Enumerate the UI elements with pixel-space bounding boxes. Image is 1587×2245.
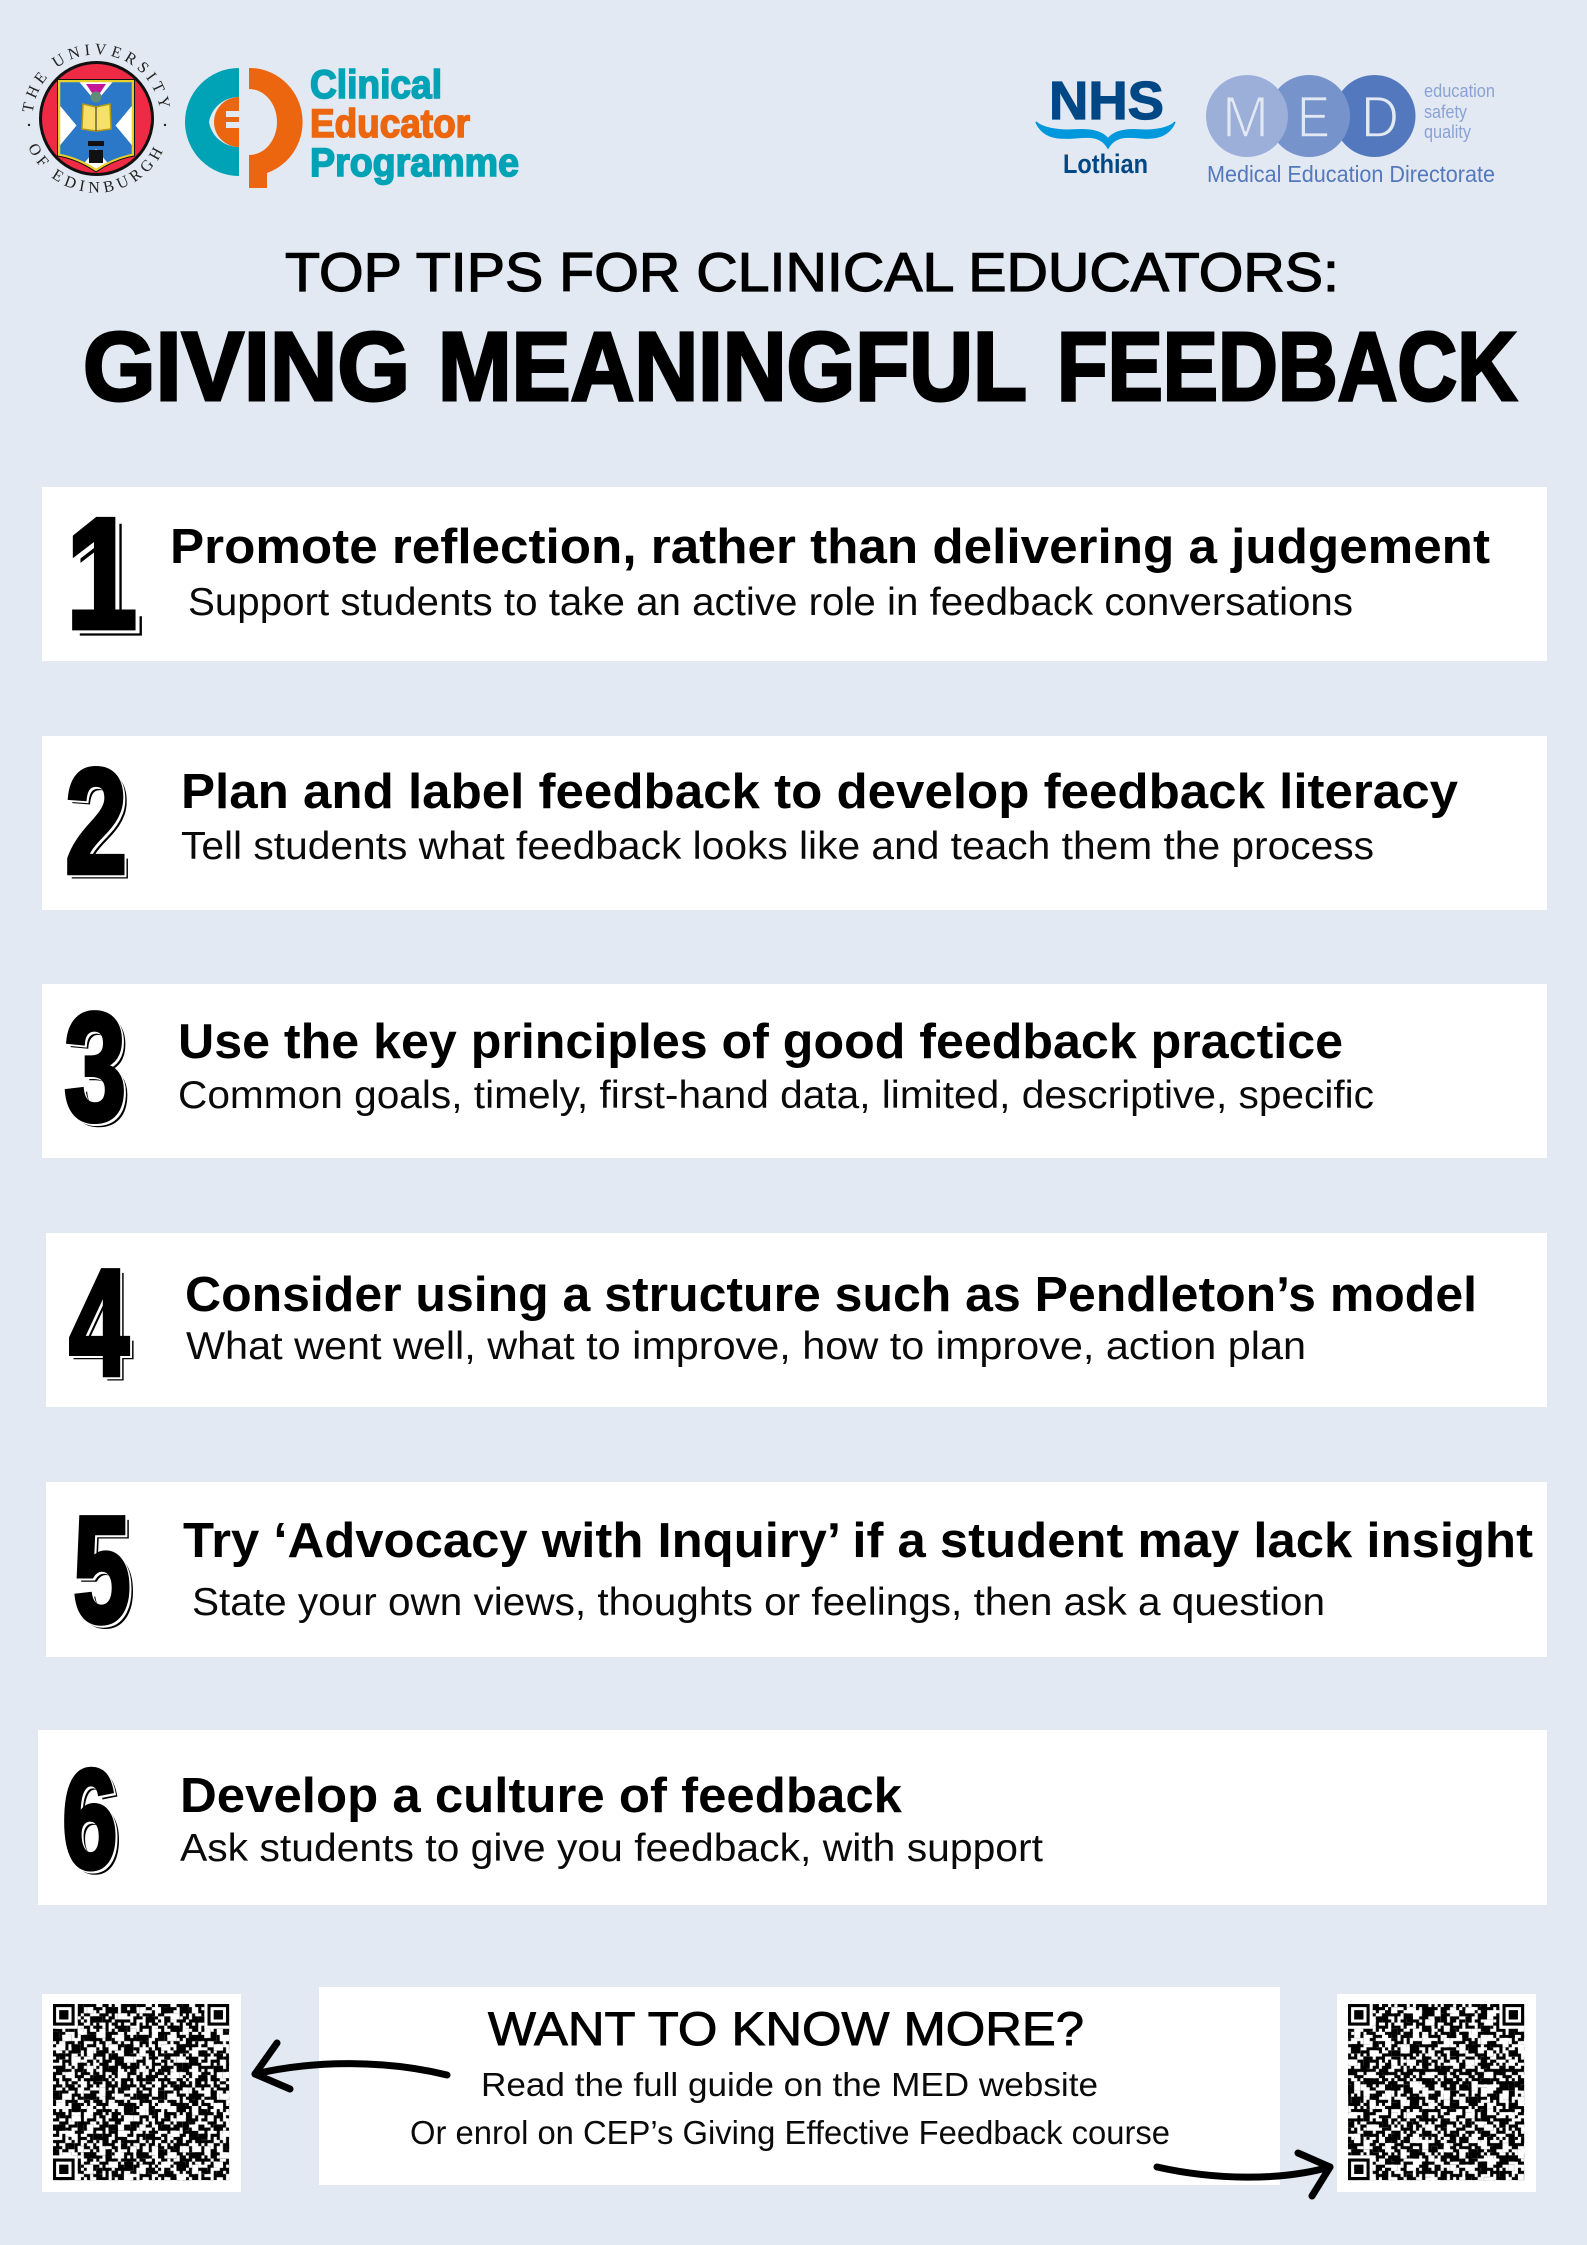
number 6: 6 xyxy=(64,1743,120,1901)
tip 2 text: Tell students what feedback looks like and teach them the process xyxy=(181,825,1374,868)
logo: University of Edinburgh seal: THE UNIVERSITY xyxy=(22,44,170,112)
logo: Medical Education Directorate: E xyxy=(1297,85,1330,150)
logo: Clinical Educator Programme xyxy=(185,63,519,188)
logo: NHS Lothian xyxy=(1036,71,1175,179)
panel: tip 4 xyxy=(46,1233,1547,1411)
tip 1 text: Support students to take an active role in feedback conversations xyxy=(188,581,1353,624)
panel: tip 6 xyxy=(38,1730,1547,1905)
logo: Medical Education Directorate: M xyxy=(1222,85,1269,150)
number 4: 4 xyxy=(71,1240,131,1409)
title: giving meaningful feedback: GIVING xyxy=(83,312,410,421)
logo: Medical Education Directorate xyxy=(1206,75,1495,187)
logo: Clinical Educator Programme: Programme xyxy=(310,141,519,185)
tip 1 heading: Promote reflection, rather than delivering a judgement xyxy=(170,520,1490,574)
tip 3 heading: Use the key principles of good feedback practice xyxy=(178,1015,1343,1069)
logo: Clinical Educator Programme: Educator xyxy=(310,102,470,146)
tip 6 text: Ask students to give you feedback, with support xyxy=(180,1827,1043,1870)
logo: NHS Lothian: NHS xyxy=(1049,71,1164,131)
number 4: 4 xyxy=(73,1242,133,1411)
number 3: 3 xyxy=(66,982,128,1155)
logo: Medical Education Directorate: education xyxy=(1424,81,1495,101)
enrol line: Or enrol on CEP’s Giving Effective Feedback course xyxy=(410,2114,1170,2151)
panel: tip 5 xyxy=(46,1482,1547,1659)
title: giving meaningful feedback: MEANINGFUL xyxy=(438,312,1027,421)
number 5: 5 xyxy=(75,1486,133,1657)
tip 4 heading: Consider using a structure such as Pendleton’s model xyxy=(185,1268,1477,1322)
tip 5 heading: Try ‘Advocacy with Inquiry’ if a student may lack insight xyxy=(183,1514,1533,1568)
QR code: CEP course xyxy=(1337,1994,1536,2192)
arrow: to right QR code xyxy=(1157,2153,1330,2196)
logo: NHS Lothian: Lothian xyxy=(1063,149,1148,179)
number 2: 2 xyxy=(65,738,127,906)
logo: Medical Education Directorate: safety xyxy=(1424,102,1467,122)
tip 2 heading: Plan and label feedback to develop feedback literacy xyxy=(181,765,1458,819)
logo: Clinical Educator Programme: Clinical xyxy=(310,63,442,107)
title: giving meaningful feedback: FEEDBACK xyxy=(1057,312,1517,421)
number 4: 4 xyxy=(69,1238,129,1407)
number 1: 1 xyxy=(70,489,141,665)
number 1: 1 xyxy=(66,486,137,662)
number 1: 1 xyxy=(73,492,144,668)
number 3: 3 xyxy=(68,984,130,1157)
heading: top tips: TOP TIPS FOR CLINICAL EDUCATORS: xyxy=(285,241,1339,303)
number 6: 6 xyxy=(66,1745,122,1903)
title: giving meaningful feedback xyxy=(83,312,1517,421)
number 3: 3 xyxy=(64,980,126,1153)
number 2: 2 xyxy=(67,740,129,908)
logo: Medical Education Directorate: Medical Education Directorate xyxy=(1207,161,1495,187)
panel: tip 1 xyxy=(42,486,1547,668)
arrow: to left QR code xyxy=(255,2043,447,2089)
tip 5 text: State your own views, thoughts or feelings, then ask a question xyxy=(192,1581,1325,1624)
logo: University of Edinburgh seal: OF EDINBURGH xyxy=(30,144,163,192)
panel: tip 2 xyxy=(42,736,1547,910)
tip 6 heading: Develop a culture of feedback xyxy=(180,1769,903,1823)
number 5: 5 xyxy=(77,1488,135,1659)
QR code: MED website xyxy=(42,1994,241,2192)
number 5: 5 xyxy=(73,1484,131,1655)
tip 4 text: What went well, what to improve, how to improve, action plan xyxy=(186,1325,1306,1368)
number 6: 6 xyxy=(62,1741,118,1899)
logo: Medical Education Directorate: quality xyxy=(1424,122,1471,142)
want to know more heading: WANT TO KNOW MORE? xyxy=(488,2002,1084,2055)
tip 3 text: Common goals, timely, first-hand data, limited, descriptive, specific xyxy=(178,1074,1374,1117)
panel: want to know more xyxy=(319,1987,1280,2185)
logo: University of Edinburgh seal xyxy=(22,44,170,192)
panel: tip 3 xyxy=(42,980,1547,1158)
read the guide line: Read the full guide on the MED website xyxy=(481,2066,1098,2103)
logo: Medical Education Directorate: D xyxy=(1361,85,1399,150)
number 2: 2 xyxy=(69,742,131,910)
